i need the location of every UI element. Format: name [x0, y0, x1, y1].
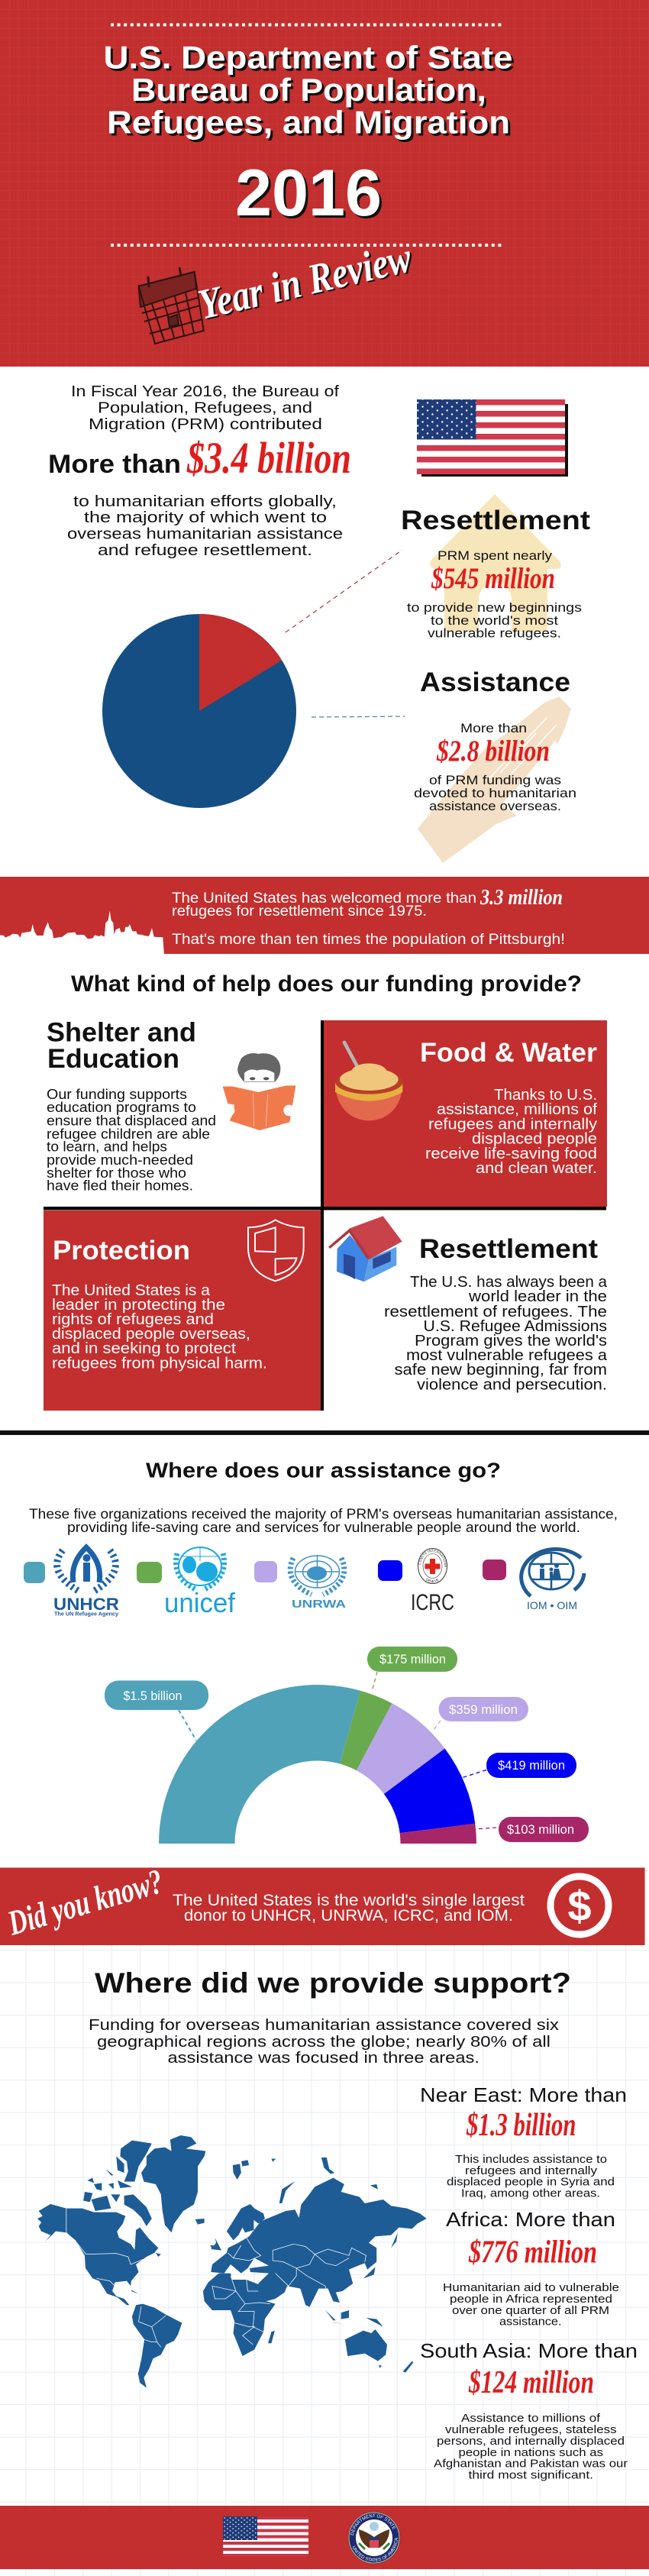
- did you know text: The United States is the world's single largest: [173, 1892, 525, 1909]
- protection: rights of refugees and: [52, 1311, 214, 1328]
- icon: child reading: [223, 1053, 295, 1130]
- panel: near east: displaced people in Syria and: [447, 2175, 615, 2189]
- shelter and education: to learn, and helps: [47, 1139, 167, 1155]
- icon: blue house: [328, 1216, 402, 1282]
- data label: UNHCR: $1.5 billion: [124, 1689, 182, 1703]
- icon: dollar: $: [567, 1882, 592, 1930]
- panel: header: [0, 0, 649, 367]
- panel: south asia: vulnerable refugees, stateless: [445, 2423, 617, 2436]
- icon: dollar: [551, 1876, 609, 1934]
- legend: UNHCR: [24, 1547, 119, 1618]
- icon: state department seal: DEPARTMENT OF STATE: [350, 2514, 396, 2536]
- legend: ICRC: [378, 1548, 454, 1615]
- panel: resettlement: [401, 494, 590, 640]
- banner text: [172, 886, 565, 948]
- text block: intro: $3.4 billion: [186, 433, 351, 483]
- data label: UNICEF: $175 million: [379, 1652, 446, 1666]
- panel: near east: Near East: More than: [420, 2083, 627, 2106]
- data label: ICRC: $419 million: [498, 1758, 565, 1773]
- banner text: refugees for resettlement since 1975.: [172, 903, 427, 920]
- resettlement quadrant: [384, 1234, 608, 1393]
- panel: near east: This includes assistance to: [455, 2153, 607, 2166]
- year in review label: Year in Review: [194, 234, 416, 329]
- legend: UNHCR: The UN Refugee Agency: [54, 1611, 118, 1618]
- panel: refugee banner: [0, 877, 649, 955]
- panel: help grid: [44, 1017, 608, 1411]
- text block: support intro: [89, 2017, 559, 2067]
- resettlement quadrant: most vulnerable refugees a: [406, 1347, 608, 1364]
- panel: africa: [443, 2208, 619, 2328]
- text block: intro: Population, Refugees, and: [98, 400, 312, 417]
- resettlement quadrant: violence and persecution.: [417, 1376, 607, 1393]
- text block: intro: and refugee resettlement.: [98, 542, 312, 559]
- title: Refugees, and Migration: [107, 105, 510, 141]
- title: [104, 40, 513, 141]
- banner text: That's more than ten times the population of Pittsburgh!: [172, 932, 565, 948]
- food and water: [420, 1038, 597, 1177]
- resettlement quadrant: Resettlement: [419, 1234, 598, 1264]
- data label: ICRC: [486, 1753, 576, 1778]
- panel: south asia: third most significant.: [469, 2468, 593, 2482]
- resettlement quadrant: world leader in the: [468, 1288, 607, 1305]
- panel: near east: Iraq, among other areas.: [461, 2187, 600, 2200]
- did you know label: Did you know?: [3, 1861, 167, 1943]
- food and water: and clean water.: [476, 1160, 597, 1177]
- legend: organizations: [24, 1543, 586, 1618]
- protection: refugees from physical harm.: [52, 1355, 267, 1372]
- panel: south asia: [420, 2339, 638, 2482]
- legend: IOM: IOM • OIM: [527, 1599, 577, 1611]
- icon: house watermark: [430, 494, 561, 632]
- shelter and education: [47, 1017, 216, 1193]
- shelter and education: refugee children are able: [47, 1126, 210, 1142]
- heading: funding: What kind of help does our funding provide?: [71, 971, 582, 997]
- assistance text: devoted to humanitarian: [414, 786, 576, 800]
- data label: UNRWA: [438, 1697, 528, 1721]
- legend: UNICEF: unicef: [164, 1587, 236, 1618]
- year: 2016: [235, 157, 382, 230]
- pie chart: [102, 550, 405, 808]
- text block: support intro: geographical regions across the globe; nearly 80% of all: [97, 2034, 551, 2051]
- did you know text: donor to UNHCR, UNRWA, ICRC, and IOM.: [184, 1907, 513, 1925]
- assistance text: of PRM funding was: [429, 773, 561, 787]
- food and water: displaced people: [472, 1131, 597, 1148]
- resettlement text: to provide new beginnings: [407, 600, 582, 615]
- panel: africa: Humanitarian aid to vulnerable: [443, 2281, 619, 2294]
- panel: africa: $776 million: [468, 2235, 597, 2271]
- shelter and education: ensure that displaced and: [47, 1112, 216, 1129]
- text block: intro: In Fiscal Year 2016, the Bureau of: [71, 383, 340, 400]
- protection: leader in protecting the: [52, 1297, 225, 1314]
- protection: and in seeking to protect: [52, 1340, 236, 1357]
- text block: intro: to humanitarian efforts globally,: [73, 493, 337, 510]
- panel: south asia: Assistance to millions of: [461, 2412, 601, 2425]
- data label: UNHCR: [105, 1680, 208, 1710]
- text block: intro: More than: [48, 450, 181, 479]
- resettlement heading: Resettlement: [401, 506, 590, 535]
- panel: africa: over one quarter of all PRM: [452, 2304, 609, 2317]
- food and water: receive life-saving food: [425, 1146, 597, 1162]
- skyline: [0, 911, 164, 955]
- assistance text: [414, 721, 576, 813]
- resettlement quadrant: safe new beginning, far from: [394, 1362, 607, 1378]
- data label: IOM: $103 million: [507, 1822, 574, 1837]
- food and water: Thanks to U.S.: [494, 1087, 597, 1104]
- panel: south asia: South Asia: More than: [420, 2339, 638, 2362]
- legend: UNRWA: [254, 1556, 346, 1611]
- text block: organizations intro: providing life-saving care and services for vulnerable people around the world.: [67, 1520, 580, 1535]
- assistance text: More than: [460, 721, 527, 735]
- shelter and education: education programs to: [47, 1099, 196, 1115]
- panel: south asia: persons, and internally displaced: [437, 2435, 625, 2448]
- title: U.S. Department of State: [104, 40, 513, 76]
- panel: footer: [0, 2506, 649, 2569]
- data label: IOM: [499, 1817, 589, 1842]
- title: Bureau of Population,: [131, 72, 486, 108]
- text block: intro: [48, 383, 351, 559]
- world map: [37, 2135, 427, 2388]
- icon: state department seal: [348, 2512, 400, 2564]
- panel: africa: assistance.: [499, 2316, 562, 2328]
- food and water: refugees and internally: [428, 1117, 597, 1133]
- icon: state department seal: UNITED STATES OF AMERICA: [353, 2537, 398, 2561]
- shelter and education: Shelter and: [47, 1017, 196, 1048]
- panel: south asia: Afghanistan and Pakistan was our: [434, 2458, 628, 2470]
- panel: assistance: [414, 667, 576, 863]
- heading: support: Where did we provide support?: [95, 1967, 571, 1999]
- did you know text: [173, 1892, 525, 1925]
- data label: UNICEF: [367, 1647, 457, 1672]
- assistance text: $2.8 billion: [436, 735, 550, 768]
- resettlement quadrant: resettlement of refugees. The: [384, 1304, 607, 1320]
- shelter and education: Our funding supports: [47, 1086, 187, 1102]
- resettlement quadrant: The U.S. has always been a: [410, 1274, 608, 1291]
- text block: support intro: Funding for overseas humanitarian assistance covered six: [89, 2017, 559, 2034]
- shelter and education: shelter for those who: [47, 1165, 186, 1181]
- protection: The United States is a: [52, 1282, 211, 1299]
- text block: support intro: assistance was focused in three areas.: [168, 2050, 479, 2067]
- assistance text: assistance overseas.: [429, 799, 561, 813]
- protection: Protection: [53, 1236, 190, 1265]
- icon: shield: [248, 1220, 304, 1281]
- resettlement text: [407, 548, 582, 640]
- legend: ICRC: ICRC: [411, 1590, 454, 1615]
- banner text: 3.3 million: [479, 886, 563, 910]
- banner text: The United States has welcomed more than: [172, 890, 476, 907]
- icon: footer flag: [223, 2516, 308, 2557]
- text block: intro: Migration (PRM) contributed: [89, 416, 322, 433]
- legend: UNRWA: UNRWA: [292, 1598, 346, 1611]
- panel: near east: [420, 2083, 627, 2200]
- text block: intro: overseas humanitarian assistance: [67, 525, 343, 542]
- resettlement text: to the world's most: [431, 613, 558, 628]
- protection: [52, 1236, 267, 1372]
- heading: assistance destinations: Where does our assistance go?: [146, 1459, 501, 1482]
- text block: organizations intro: [29, 1506, 618, 1535]
- protection: displaced people overseas,: [52, 1326, 250, 1343]
- text block: intro: the majority of which went to: [84, 509, 327, 526]
- icon: bowl: [335, 1042, 403, 1120]
- panel: africa: Africa: More than: [446, 2208, 615, 2231]
- resettlement text: PRM spent nearly: [438, 548, 553, 563]
- page background grid: [0, 1945, 649, 2576]
- food and water: assistance, millions of: [437, 1101, 597, 1118]
- food and water: Food & Water: [420, 1038, 597, 1068]
- panel: did you know: [0, 1861, 644, 1945]
- legend: IOM: [483, 1549, 584, 1611]
- legend: ICRC: COMITE INTERNATIONAL: [418, 1549, 447, 1567]
- divider rule: [0, 1430, 649, 1435]
- resettlement quadrant: Program gives the world's: [415, 1333, 607, 1349]
- legend: UNICEF: [137, 1547, 236, 1618]
- icon: calendar: [139, 267, 204, 344]
- panel: near east: refugees and internally: [465, 2164, 598, 2177]
- icon: hand watermark: [418, 697, 571, 863]
- resettlement text: $545 million: [431, 562, 555, 595]
- shelter and education: have fled their homes.: [47, 1178, 193, 1193]
- text block: organizations intro: These five organizations received the majority of PRM's overseas humanitarian assistance,: [29, 1506, 618, 1521]
- shelter and education: Education: [47, 1044, 179, 1074]
- icon: US flag: [417, 399, 568, 477]
- legend: ICRC: GENEVE: [426, 1578, 439, 1582]
- resettlement text: vulnerable refugees.: [428, 626, 561, 640]
- panel: africa: people in Africa represented: [450, 2293, 612, 2306]
- resettlement quadrant: U.S. Refugee Admissions: [423, 1318, 607, 1335]
- assistance heading: Assistance: [420, 667, 570, 697]
- panel: south asia: people in nations such as: [458, 2446, 603, 2459]
- legend: UNHCR: UNHCR: [53, 1595, 119, 1614]
- panel: near east: $1.3 billion: [466, 2108, 576, 2143]
- data label: UNRWA: $359 million: [449, 1702, 518, 1717]
- shelter and education: provide much-needed: [47, 1152, 193, 1168]
- panel: south asia: $124 million: [468, 2365, 594, 2400]
- donut chart: [105, 1647, 589, 1844]
